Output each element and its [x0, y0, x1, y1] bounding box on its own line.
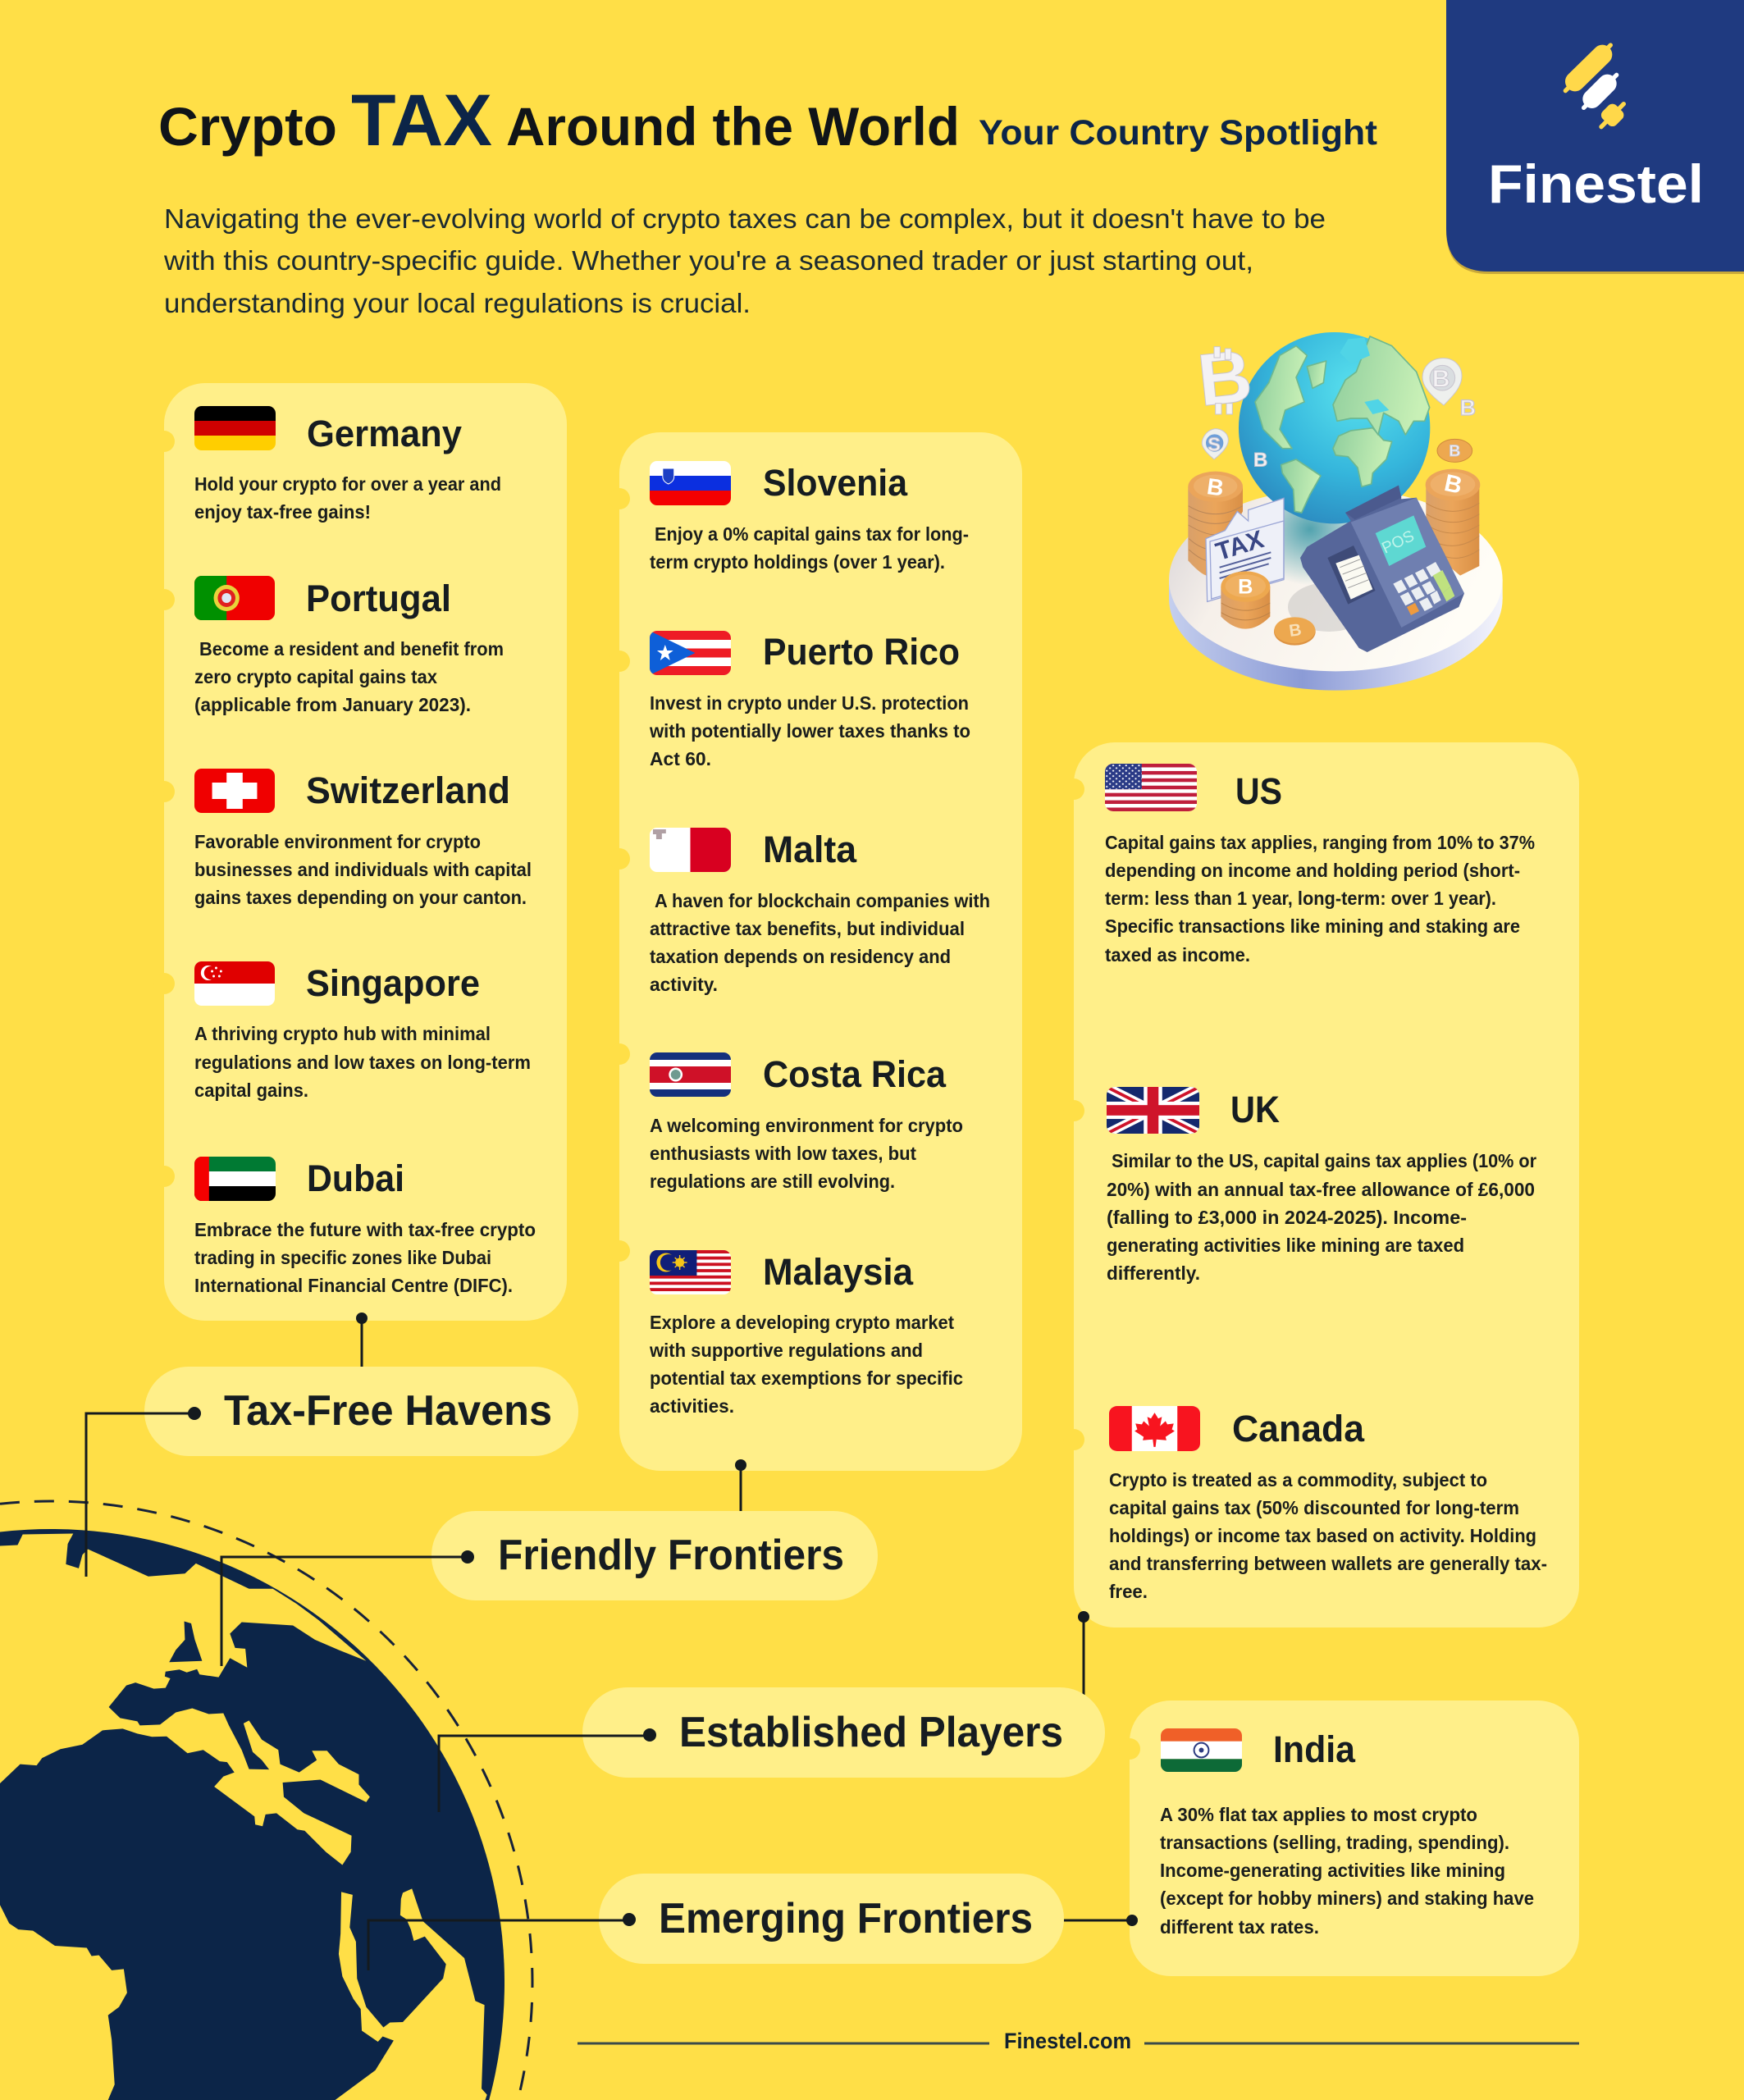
flag: Canada [1109, 1406, 1200, 1451]
heading: Costa Rica: Costa Rica [763, 1053, 947, 1095]
text: Switzerland: businesses and individuals with capital [194, 859, 532, 880]
text: US: term: less than 1 year, long-term: over 1 year). [1105, 888, 1496, 909]
panel: friendly frontiers [609, 432, 1022, 1471]
logo panel [1446, 0, 1744, 274]
text: Dubai [194, 1219, 536, 1296]
connector: Emerging Frontiers to map [368, 1920, 629, 1970]
text: UK: (falling to £3,000 in 2024-2025). Income- [1107, 1207, 1467, 1228]
small coin stack: B [1288, 620, 1303, 641]
text: Canada: capital gains tax (50% discounted for long-term [1109, 1497, 1519, 1518]
text: US [1105, 832, 1535, 966]
text: Switzerland: gains taxes depending on your canton. [194, 887, 527, 908]
text: Costa Rica: enthusiasts with low taxes, but [650, 1143, 916, 1164]
heading: Malaysia: Malaysia [763, 1251, 914, 1293]
text: Germany [194, 473, 501, 523]
flag: Dubai [194, 1157, 276, 1201]
flag: Malta [650, 828, 731, 872]
logo wordmark: Finestel [1488, 153, 1704, 214]
text: Malaysia: Explore a developing crypto market [650, 1312, 954, 1333]
earth globe [1239, 332, 1430, 523]
text: Singapore: regulations and low taxes on long-term [194, 1052, 531, 1073]
title: Crypto [158, 96, 337, 157]
connector: Tax-Free Havens to map [86, 1413, 194, 1577]
heading: India: India [1273, 1728, 1356, 1770]
text: Malaysia [649, 1312, 963, 1417]
panel: tax-free havens [153, 383, 567, 1321]
text: Malta: A haven for blockchain companies with [655, 890, 990, 911]
text: Dubai: trading in specific zones like Dubai [194, 1247, 491, 1268]
text: US: taxed as income. [1105, 944, 1250, 966]
text: Malta: activity. [650, 974, 718, 995]
text: Malta: taxation depends on residency and [650, 946, 951, 967]
text: Dubai: Embrace the future with tax-free crypto [194, 1219, 536, 1240]
text: Malaysia: potential tax exemptions for specific [650, 1367, 963, 1389]
text: Costa Rica: A welcoming environment for crypto [650, 1115, 963, 1136]
floating bitcoin symbols: B [1449, 443, 1460, 460]
flag: Costa Rica [650, 1052, 731, 1097]
connector: havens card to pill [356, 1312, 368, 1370]
title: Your Country Spotlight [979, 113, 1377, 153]
flag: Puerto Rico [650, 631, 731, 675]
intro paragraph: Navigating the ever-evolving world of crypto taxes can be complex, but it doesn't have to be [164, 203, 1326, 234]
flag: India [1161, 1728, 1242, 1772]
text: UK [1107, 1150, 1536, 1284]
title [158, 79, 1377, 161]
text: Slovenia: Enjoy a 0% capital gains tax for long- [655, 523, 969, 545]
text: India: Income-generating activities like mining [1160, 1860, 1505, 1881]
pill: Friendly Frontiers [431, 1511, 878, 1600]
text: UK: differently. [1107, 1262, 1200, 1284]
text: Germany: Hold your crypto for over a year and [194, 473, 501, 495]
text: Costa Rica [650, 1115, 963, 1192]
heading: Switzerland: Switzerland [306, 769, 510, 811]
floating bitcoin symbols: B [1253, 449, 1267, 471]
pill: Friendly Frontiers: Friendly Frontiers [498, 1532, 844, 1579]
back coin stacks: B [1205, 473, 1226, 501]
text: Malaysia: activities. [650, 1395, 734, 1417]
text: Canada: holdings) or income tax based on activity. Holding [1109, 1525, 1536, 1546]
POS terminal [1300, 486, 1464, 652]
flag: Portugal [194, 576, 275, 620]
floating bitcoin symbols: B [1432, 366, 1450, 393]
text: India [1160, 1804, 1534, 1938]
flag: Germany [194, 406, 276, 450]
heading: UK: UK [1230, 1089, 1280, 1130]
text: Malaysia: with supportive regulations and [649, 1340, 923, 1361]
text: Switzerland: Favorable environment for crypto [194, 831, 481, 852]
intro paragraph: understanding your local regulations is crucial. [164, 288, 751, 318]
text: Puerto Rico: Invest in crypto under U.S. protection [650, 692, 969, 714]
panel: established players [1063, 742, 1579, 1628]
text: Slovenia: term crypto holdings (over 1 year). [650, 551, 945, 573]
dashed orbit ring [0, 1501, 532, 2100]
text: Switzerland [194, 831, 532, 908]
connector: Established Players to map [439, 1736, 650, 1812]
tax form: TAX [1212, 525, 1267, 566]
text: Singapore: capital gains. [194, 1080, 308, 1101]
text: Canada [1109, 1469, 1547, 1602]
floating bitcoin symbols: S [1208, 433, 1221, 454]
flag: UK [1107, 1087, 1199, 1134]
text: Canada: and transferring between wallets are generally tax- [1109, 1553, 1547, 1574]
text: Puerto Rico: with potentially lower taxes thanks to [649, 720, 970, 742]
text: US: depending on income and holding period (short- [1105, 860, 1520, 881]
heading: Slovenia: Slovenia [763, 462, 908, 504]
connector: established card to pill [1078, 1611, 1089, 1695]
text: Costa Rica: regulations are still evolving. [650, 1171, 895, 1192]
floating bitcoin symbols: B [1194, 336, 1256, 422]
text: Germany: enjoy tax-free gains! [194, 501, 371, 523]
back coin stacks [1188, 469, 1480, 576]
flag: Singapore [194, 961, 275, 1006]
small coin stack [1221, 571, 1316, 646]
text: India: transactions (selling, trading, spending). [1160, 1832, 1509, 1853]
pill: Emerging Frontiers: Emerging Frontiers [659, 1895, 1033, 1942]
flag: Slovenia [650, 461, 731, 505]
panel: emerging frontiers [1119, 1701, 1579, 1976]
text: UK: Similar to the US, capital gains tax applies (10% or [1112, 1150, 1536, 1171]
floating bitcoin symbols [1194, 336, 1476, 471]
intro paragraph: with this country-specific guide. Whether you're a seasoned trader or just starting out, [163, 245, 1253, 276]
heading: Canada: Canada [1232, 1408, 1365, 1449]
title: Around the World [506, 96, 960, 157]
heading: Singapore: Singapore [306, 962, 480, 1004]
text: Puerto Rico: Act 60. [650, 748, 711, 769]
text: Malta [650, 890, 990, 995]
connector: Friendly Frontiers to map [221, 1557, 468, 1666]
tax form [1206, 498, 1284, 601]
heading: US: US [1235, 770, 1282, 812]
text: India: A 30% flat tax applies to most crypto [1160, 1804, 1477, 1825]
globe map [0, 1529, 504, 2100]
heading: Germany: Germany [307, 413, 462, 454]
heading: Puerto Rico: Puerto Rico [763, 631, 960, 673]
text: Singapore: A thriving crypto hub with minimal [194, 1023, 491, 1044]
text: Singapore [194, 1023, 531, 1101]
floating bitcoin symbols: B [1460, 395, 1476, 420]
pill: Established Players: Established Players [679, 1709, 1063, 1756]
heading: Portugal: Portugal [306, 578, 451, 619]
illustration: globe, coins, tax form and POS terminal [1169, 332, 1503, 691]
text: US: Specific transactions like mining and staking are [1105, 915, 1520, 937]
small coin stack: B [1238, 575, 1253, 598]
flag: US [1105, 764, 1197, 811]
text: Dubai: International Financial Centre (DIFC). [194, 1275, 513, 1296]
text: Canada: free. [1109, 1581, 1148, 1602]
text: UK: generating activities like mining are taxed [1107, 1235, 1464, 1256]
intro paragraph [163, 203, 1326, 318]
pill: Tax-Free Havens [144, 1367, 578, 1456]
title: TAX [351, 79, 492, 161]
pill: Emerging Frontiers [599, 1874, 1064, 1964]
platform [1169, 488, 1503, 691]
text: Portugal: Become a resident and benefit from [199, 638, 504, 660]
heading: Dubai: Dubai [307, 1157, 404, 1199]
text: Portugal [194, 638, 504, 715]
text: Canada: Crypto is treated as a commodity, subject to [1109, 1469, 1487, 1491]
text: Portugal: (applicable from January 2023). [194, 694, 471, 715]
heading: Malta: Malta [763, 829, 857, 870]
text: Malta: attractive tax benefits, but individual [650, 918, 965, 939]
pill: Tax-Free Havens: Tax-Free Havens [224, 1387, 552, 1435]
flag: Malaysia [650, 1250, 731, 1294]
text: India: (except for hobby miners) and staking have [1160, 1888, 1534, 1909]
text: India: different tax rates. [1160, 1916, 1319, 1938]
text: Puerto Rico [649, 692, 970, 769]
pill: Established Players [582, 1687, 1105, 1778]
text: US: Capital gains tax applies, ranging from 10% to 37% [1105, 832, 1535, 853]
logo icon: candlesticks [1565, 45, 1626, 129]
footer: Finestel.com [1004, 2029, 1131, 2053]
flag: Switzerland [194, 769, 275, 813]
text: Slovenia [650, 523, 969, 573]
POS terminal: POS [1380, 527, 1417, 558]
connector: frontiers card to pill [735, 1459, 746, 1514]
back coin stacks: B [1442, 469, 1464, 500]
text: UK: 20%) with an annual tax-free allowance of £6,000 [1107, 1179, 1535, 1200]
text: Portugal: zero crypto capital gains tax [194, 666, 437, 687]
connector: emerging pill to India card [1064, 1915, 1138, 1926]
